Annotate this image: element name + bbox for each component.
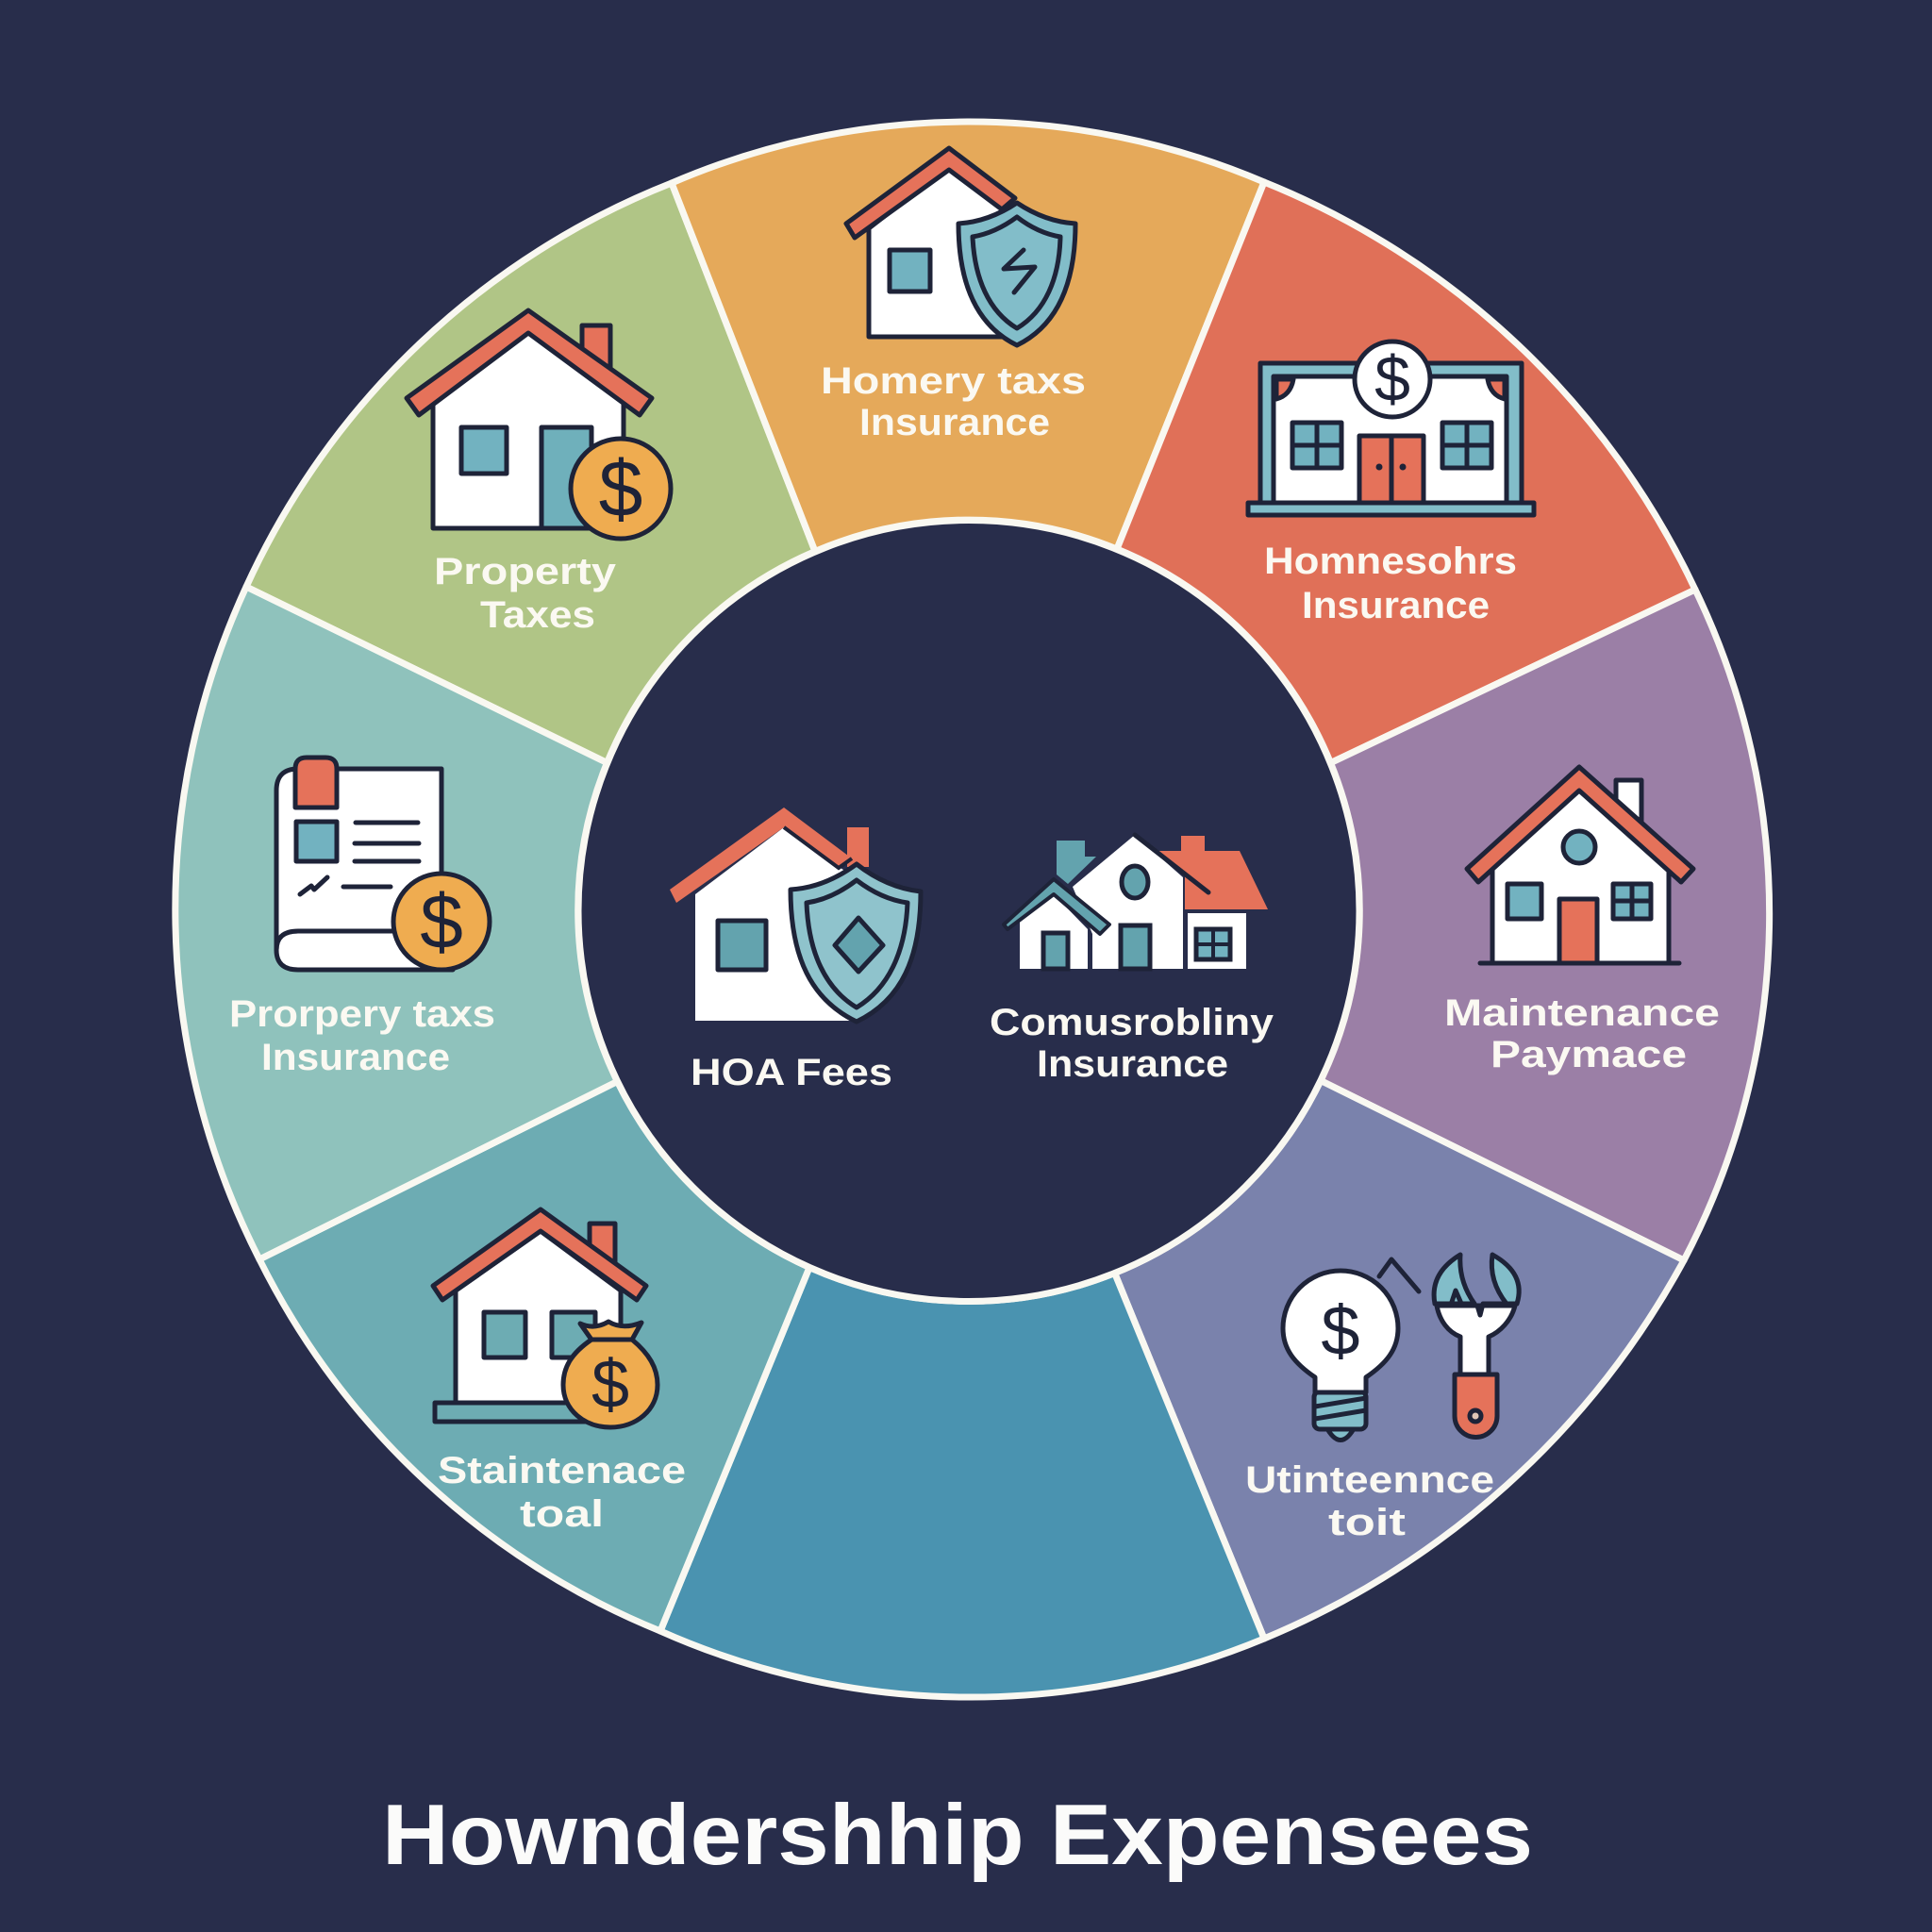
icon: house with money bag: [433, 1209, 658, 1427]
icon: dollar light bulb: [1283, 1259, 1419, 1440]
label: Homery taxs Insurance: Homery taxs: [821, 360, 1086, 402]
label: Property Taxes: Property: [434, 551, 617, 592]
panel: prorpery taxs insurance (light teal): [175, 587, 617, 1259]
icon: community of houses: [1004, 835, 1268, 969]
label: Utinteennce toit: Utinteennce: [1245, 1459, 1494, 1501]
panel: maintenance paymace (purple): [1321, 590, 1770, 1260]
label: Comusrobliny Insurance: Insurance: [1037, 1043, 1228, 1085]
label: Utinteennce toit: toit: [1328, 1502, 1406, 1543]
label: Maintenance Paymace: Maintenance: [1444, 992, 1720, 1034]
label: Comusrobliny Insurance: Comusrobliny: [990, 1002, 1274, 1043]
label: Maintenance Paymace: [1444, 992, 1720, 1075]
label: Homnesohrs Insurance: Homnesohrs: [1264, 541, 1517, 582]
icon: house with coin: $: [599, 444, 642, 533]
label: HOA Fees: HOA Fees: [691, 1052, 892, 1093]
icon: house with money bag: $: [591, 1347, 629, 1423]
panel: homery taxs insurance (orange): [672, 122, 1264, 551]
icon: storefront house with dollar badge: $: [1374, 343, 1410, 415]
icon: wrench: [1434, 1255, 1519, 1438]
label: Staintenace toal: toal: [520, 1493, 604, 1535]
label: Comusrobliny Insurance: [990, 1002, 1274, 1085]
label: Homery taxs Insurance: Insurance: [859, 402, 1050, 443]
label: Homnesohrs Insurance: [1264, 541, 1517, 626]
label: Maintenance Paymace: Paymace: [1491, 1034, 1687, 1075]
panel: homnesohrs insurance (red): [1117, 182, 1695, 763]
panel: staintenace toal (teal): [259, 1081, 809, 1631]
label: Staintenace toal: [438, 1450, 686, 1535]
panel: centre hub: [578, 521, 1359, 1302]
label: Property Taxes: Taxes: [480, 594, 595, 636]
icon: house with coin: [407, 310, 671, 539]
label: Prorpery taxs Insurance: Prorpery taxs: [229, 993, 495, 1035]
label: Property Taxes: [434, 551, 617, 636]
icon: house with round window: [1467, 767, 1693, 963]
icon: house with lightning shield: [846, 148, 1075, 345]
label: Homnesohrs Insurance: Insurance: [1302, 585, 1490, 626]
panel: utinteennce toit (slate): [1115, 1081, 1684, 1639]
label: Prorpery taxs Insurance: Insurance: [261, 1037, 450, 1078]
label: Homery taxs Insurance: [821, 360, 1086, 443]
label: Staintenace toal: Staintenace: [438, 1450, 686, 1491]
panel: empty blue segment: [660, 1268, 1264, 1697]
title: Howndershhip Expensees: [382, 1788, 1533, 1883]
icon: dollar light bulb: $: [1321, 1291, 1360, 1370]
label: Prorpery taxs Insurance: [229, 993, 495, 1078]
icon: document book with coin: $: [420, 879, 463, 965]
icon: storefront house with dollar badge: [1248, 341, 1534, 515]
label: Utinteennce toit: [1245, 1459, 1494, 1543]
icon: document book with coin: [276, 758, 490, 970]
panel: property taxes (green): [246, 183, 815, 763]
icon: house with diamond shield: [670, 808, 921, 1022]
